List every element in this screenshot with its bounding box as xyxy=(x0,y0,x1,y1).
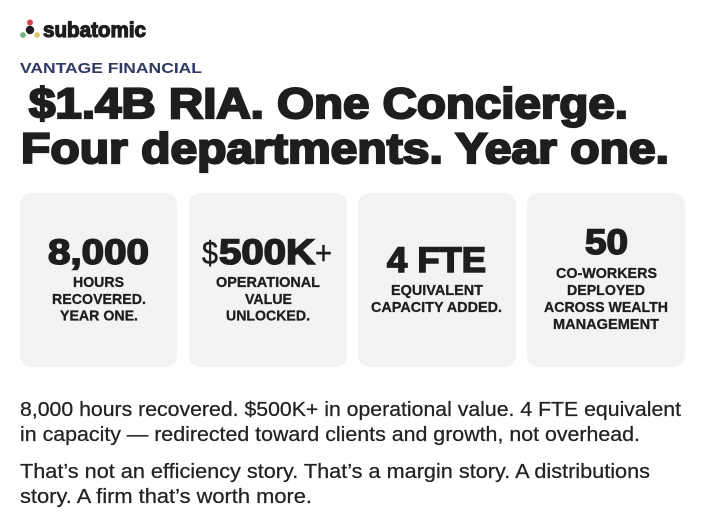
panel: operational value: VALUE xyxy=(245,292,292,308)
eyebrow: client name: VANTAGE FINANCIAL xyxy=(20,60,202,77)
panel: co-workers deployed: CO-WORKERS xyxy=(556,266,657,282)
panel: co-workers deployed: 50 xyxy=(585,223,628,262)
panel: co-workers deployed xyxy=(527,193,685,367)
text block: results summary: in capacity — redirected toward clients and growth, not overhead. xyxy=(20,423,640,446)
panel: operational value: $ xyxy=(202,235,218,271)
text block: margin story xyxy=(20,460,650,508)
panel: operational value xyxy=(189,193,347,367)
text block: results summary: 8,000 hours recovered. $500K+ in operational value. 4 FTE equivalent xyxy=(20,398,681,421)
panel: operational value: OPERATIONAL xyxy=(216,275,320,291)
panel: co-workers deployed: MANAGEMENT xyxy=(553,317,659,333)
logo: subatomic: subatomic xyxy=(43,19,146,42)
panel: hours recovered: HOURS xyxy=(73,275,124,291)
title xyxy=(21,80,669,173)
panel: operational value: + xyxy=(315,235,332,271)
title: Four departments. Year one. xyxy=(21,125,669,173)
panel: equivalent capacity: EQUIVALENT xyxy=(391,283,483,299)
panel: co-workers deployed: DEPLOYED xyxy=(567,283,645,299)
panel: hours recovered: YEAR ONE. xyxy=(60,308,138,324)
text block: margin story: story. A firm that’s worth more. xyxy=(20,485,312,508)
panel: hours recovered: 8,000 xyxy=(48,233,149,272)
panel: equivalent capacity xyxy=(358,193,516,367)
title: $1.4B RIA. One Concierge. xyxy=(29,80,628,128)
panel: equivalent capacity: 4 FTE xyxy=(387,241,486,280)
panel: operational value: 500K xyxy=(219,233,315,272)
panel: hours recovered xyxy=(20,193,177,367)
text block: results summary xyxy=(20,398,681,446)
panel: co-workers deployed: ACROSS WEALTH xyxy=(544,300,668,316)
panel: operational value: UNLOCKED. xyxy=(226,308,310,324)
panel: equivalent capacity: CAPACITY ADDED. xyxy=(371,300,502,316)
text block: margin story: That’s not an efficiency story. That’s a margin story. A distributions xyxy=(20,460,650,483)
panel: hours recovered: RECOVERED. xyxy=(52,292,146,308)
